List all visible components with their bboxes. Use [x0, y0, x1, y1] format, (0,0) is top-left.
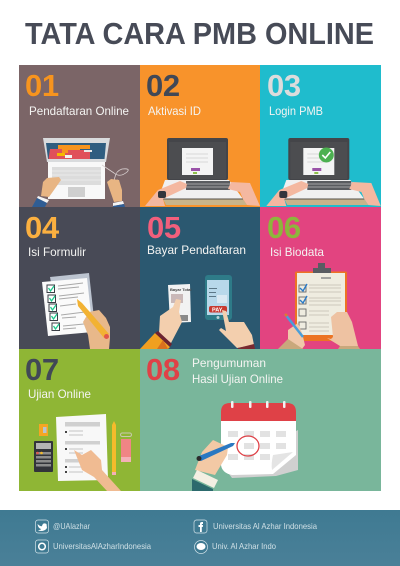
- label: Aktivasi ID: Aktivasi ID: [148, 104, 201, 118]
- label: Isi Formulir: Isi Formulir: [28, 245, 86, 259]
- icon: twitter: [36, 520, 48, 533]
- icon: checklist paper and pencil: [42, 273, 110, 349]
- icon: laptop activation form: [145, 138, 260, 206]
- label: Pendaftaran Online: Pendaftaran Online: [29, 104, 129, 118]
- footer band: [0, 510, 400, 566]
- panel: step 04: [19, 207, 140, 349]
- icon: payment receipt and phone: [140, 275, 255, 349]
- number 05: 05: [147, 210, 181, 245]
- number 04: 04: [25, 210, 60, 245]
- text: twitter handle: @UAlazhar: [53, 521, 90, 531]
- icon: payment receipt and phone: Bayar Total: [170, 287, 192, 292]
- text: line name: Univ. Al Azhar Indo: [212, 541, 276, 551]
- label: Pengumuman Hasil Ujian Online: [192, 356, 283, 386]
- icon: payment receipt and phone: PAY: [212, 308, 223, 314]
- panel: step 06: [260, 207, 381, 349]
- icon: laptop login with check: [266, 138, 381, 206]
- panel: step 05: [140, 207, 260, 349]
- icon: facebook: [194, 520, 207, 533]
- icon: laptop with hands: [32, 138, 128, 207]
- number 07: 07: [25, 352, 59, 387]
- panel: step 07: [19, 349, 140, 491]
- label: Isi Biodata: Isi Biodata: [270, 245, 324, 259]
- text: instagram name: UniversitasAlAzharIndonesia: [53, 541, 151, 551]
- label: Login PMB: Login PMB: [269, 104, 323, 118]
- panel: step 03: [260, 65, 381, 207]
- panel: step 01: [19, 65, 140, 207]
- icon: line: [194, 540, 208, 554]
- label: Bayar Pendaftaran: Bayar Pendaftaran: [147, 243, 246, 257]
- panel: step 08: [140, 349, 381, 491]
- label: Ujian Online: Ujian Online: [28, 387, 91, 401]
- number 08: 08: [146, 352, 180, 387]
- number 02: 02: [146, 68, 180, 103]
- title: TATA CARA PMB ONLINE: [25, 17, 374, 51]
- icon: clipboard with hands: [278, 263, 360, 349]
- label: Pengumuman Hasil Ujian Online: Pengumuman: [192, 356, 266, 370]
- label: Pengumuman Hasil Ujian Online: Hasil Ujian Online: [192, 372, 283, 386]
- icon: calendar and hand with pen: [192, 401, 298, 491]
- icon: exam paper, calculator, stationery: [34, 414, 132, 491]
- number 06: 06: [267, 210, 301, 245]
- number 01: 01: [25, 68, 59, 103]
- icon: instagram: [36, 540, 48, 553]
- number 03: 03: [267, 68, 301, 103]
- panel: step 02: [140, 65, 260, 207]
- text: facebook name: Universitas Al Azhar Indonesia: [213, 521, 317, 531]
